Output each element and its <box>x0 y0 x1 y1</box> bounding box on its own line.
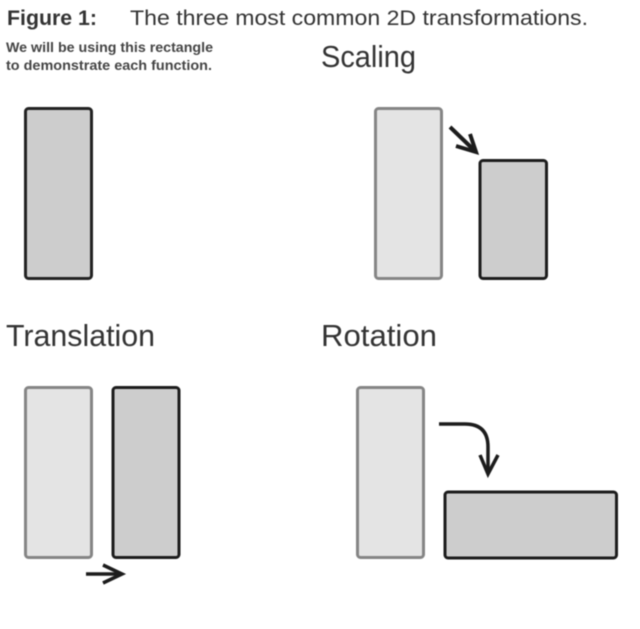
rotation: rotated rectangle <box>445 492 616 558</box>
icon: translation arrow <box>86 565 122 583</box>
panel: translation <box>26 388 179 583</box>
intro text: to demonstrate each function. <box>6 58 212 73</box>
icon: scaling arrow <box>450 127 476 152</box>
intro text: We will be using this rectangle <box>6 40 214 55</box>
intro text <box>6 40 214 73</box>
heading: scaling: Scaling <box>321 39 416 74</box>
heading: translation: Translation <box>6 318 155 353</box>
rotation: original rectangle <box>358 388 424 558</box>
heading: rotation: Rotation <box>321 318 437 353</box>
scaling: original rectangle <box>376 108 442 278</box>
title: The three most common 2D transformations. <box>130 6 588 30</box>
translation: moved rectangle <box>113 388 179 558</box>
original rectangle <box>26 108 92 278</box>
translation: original rectangle <box>26 388 92 558</box>
panel: rotation <box>358 388 616 558</box>
icon: rotation arrow <box>439 424 498 474</box>
title: Figure 1: <box>7 6 97 30</box>
panel: scaling <box>376 108 546 278</box>
scaling: scaled rectangle <box>480 160 546 278</box>
